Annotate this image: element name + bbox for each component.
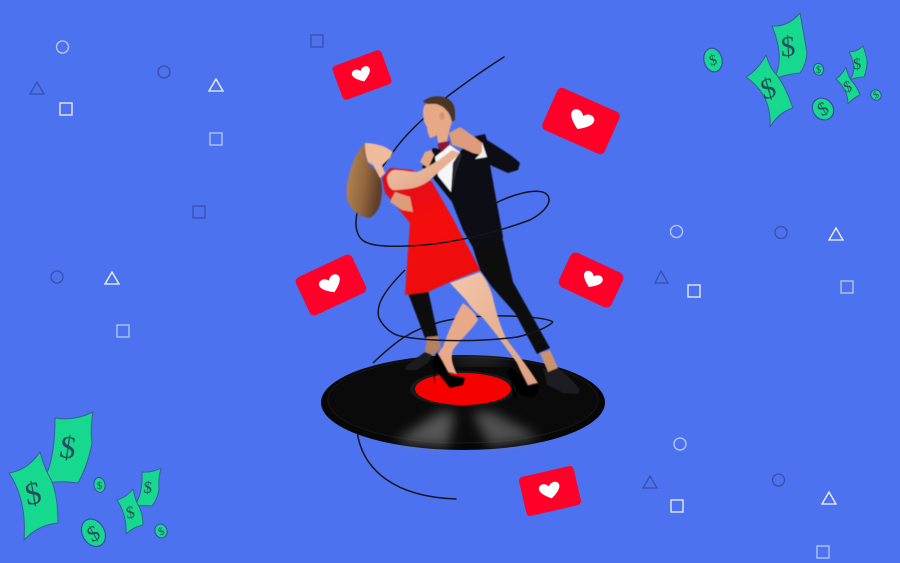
woman: hair	[346, 143, 382, 218]
man: rear ankle	[425, 336, 441, 355]
money cluster: bottom left: $	[82, 520, 104, 547]
right scattered shapes, upper	[655, 226, 853, 297]
man: fingers on woman's back	[420, 150, 434, 168]
man: shirt	[435, 145, 460, 192]
banknote A	[772, 13, 807, 80]
squiggle line: lower tail	[357, 431, 456, 499]
woman: back leg	[438, 303, 478, 374]
man: hair	[423, 96, 455, 122]
like card: upper right	[541, 86, 621, 156]
like card: top	[331, 49, 393, 101]
coin large left	[701, 46, 725, 74]
money cluster: top right: $	[842, 78, 854, 97]
record sheen left	[395, 412, 455, 446]
money cluster: top right: $	[871, 89, 881, 101]
squiggle line: back section	[356, 57, 504, 246]
woman: red dress	[382, 168, 480, 295]
vinyl record	[321, 355, 605, 450]
banknote B	[746, 55, 793, 127]
like card: right	[557, 251, 625, 309]
small banknote B	[836, 67, 860, 104]
man: ear	[440, 112, 444, 120]
money cluster: bottom left: $	[156, 525, 167, 539]
small banknote B	[117, 489, 143, 534]
woman: front leg	[450, 272, 538, 385]
top-left scattered shapes	[30, 35, 323, 337]
money cluster: top right: $	[708, 52, 719, 70]
man: rear leg trouser	[408, 290, 438, 338]
money cluster: top right: $	[814, 98, 833, 121]
man: lapel	[452, 152, 462, 192]
record label ring	[410, 371, 516, 407]
man: face and neck	[423, 104, 452, 143]
man: front ankle	[540, 350, 558, 372]
woman: face and neck	[365, 143, 393, 178]
coin medium	[93, 477, 106, 493]
money cluster: bottom left	[9, 412, 169, 551]
like card: left	[294, 253, 368, 317]
man: rear shoe	[405, 352, 432, 370]
money cluster: top right: $	[757, 72, 780, 106]
man: bow tie	[438, 141, 450, 152]
woman: raised arm	[387, 150, 460, 190]
dancing couple	[346, 96, 580, 398]
right scattered shapes, lower	[643, 438, 836, 558]
coin large	[77, 515, 110, 551]
coin small	[153, 522, 169, 540]
small banknote A	[134, 468, 161, 506]
record sheen right	[472, 412, 540, 446]
record sheen top	[450, 357, 510, 363]
man: hand on woman's back	[390, 192, 413, 212]
money cluster: top right	[701, 13, 883, 127]
man: front leg trouser	[472, 240, 550, 354]
woman: front shoe	[507, 367, 538, 398]
squiggle line: rear loop	[373, 191, 553, 363]
man: jacket	[422, 134, 520, 248]
banknote B	[9, 452, 58, 540]
banknote A	[41, 412, 93, 484]
money cluster: bottom left: $	[143, 478, 153, 497]
money cluster: top right: $	[853, 56, 862, 73]
money cluster: bottom left: $	[97, 480, 103, 492]
money cluster: top right: $	[780, 31, 796, 63]
like card: bottom	[518, 465, 582, 517]
coin small	[812, 62, 825, 76]
man: far sleeve	[405, 204, 420, 219]
money cluster: top right: $	[816, 65, 821, 76]
money cluster: bottom left: $	[58, 428, 78, 466]
woman: back shoe	[432, 352, 465, 388]
money cluster: bottom left: $	[124, 502, 136, 523]
man: cuff	[475, 142, 487, 159]
coin small right	[869, 88, 883, 102]
money cluster: bottom left: $	[22, 474, 44, 512]
man: front shoe	[543, 367, 580, 394]
record label	[415, 373, 511, 405]
coin large lower	[808, 94, 838, 124]
man: clasping hand	[449, 127, 482, 155]
squiggle line: front section	[385, 220, 553, 341]
small banknote A	[849, 46, 867, 80]
